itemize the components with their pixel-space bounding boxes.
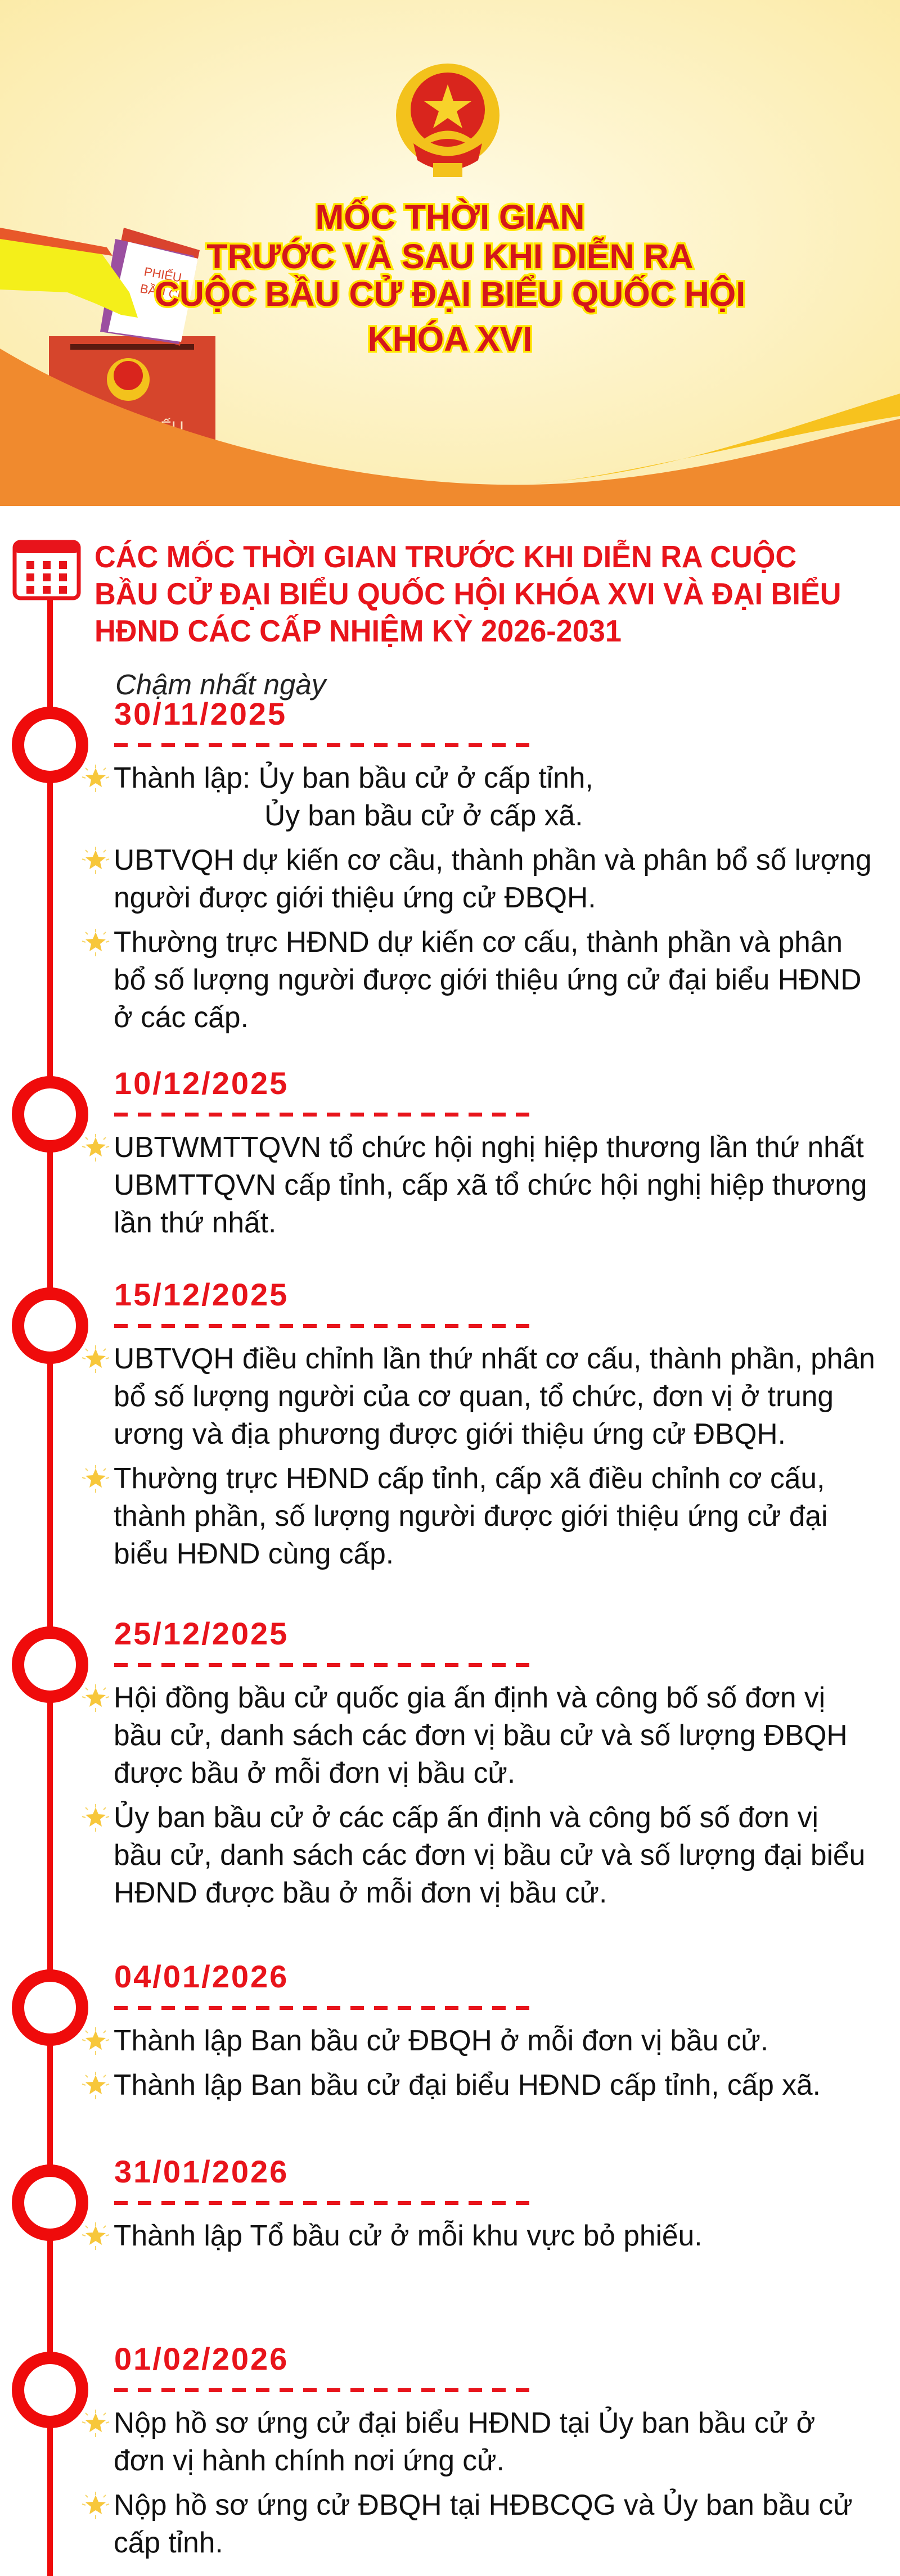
item: 31/01/2026: Thành lập Tổ bầu cử ở mỗi khu vực bỏ phiếu. [114,2219,703,2252]
item: 25/12/2025: bầu cử, danh sách các đơn vị bầu cử và số lượng đại biểu [114,1838,865,1871]
item: 15/12/2025: UBTVQH điều chỉnh lần thứ nhất cơ cấu, thành phần, phân [114,1342,875,1375]
item: 15/12/2025 [12,1277,875,1570]
ballot box illustration: BẦU CỬ [139,281,189,304]
item: 01/02/2026: Nộp hồ sơ ứng cử đại biểu HĐND tại Ủy ban bầu cử ở [114,2406,815,2439]
ballot box illustration: PHIẾU [132,418,184,437]
item: 04/01/2026: Thành lập Ban bầu cử ĐBQH ở mỗi đơn vị bầu cử. [114,2024,768,2057]
item: 25/12/2025: Ủy ban bầu cử ở các cấp ấn định và công bố số đơn vị [114,1801,818,1833]
icon: calendar [12,540,81,600]
item: 30/11/2025: 30/11/2025 [114,696,287,731]
item: 01/02/2026 [12,2341,853,2559]
item: 30/11/2025: UBTVQH dự kiến cơ cầu, thành phần và phân bổ số lượng [114,843,872,876]
ballot box illustration: PHIẾU [143,264,183,285]
item: 25/12/2025: bầu cử, danh sách các đơn vị bầu cử và số lượng ĐBQH [114,1719,848,1751]
item: 25/12/2025: 25/12/2025 [114,1616,289,1651]
decorative wave [534,394,900,483]
item: 04/01/2026: 04/01/2026 [114,1959,289,1994]
timeline vertical line [47,596,53,2576]
item: 25/12/2025 [12,1616,865,1909]
item: 15/12/2025: thành phần, số lượng người được giới thiệu ứng cử đại [114,1499,828,1532]
item: 31/01/2026 [12,2154,703,2252]
title: KHÓA XVI [368,320,532,358]
title [155,198,745,358]
item: 30/11/2025: bổ số lượng người được giới thiệu ứng cử đại biểu HĐND [114,963,861,996]
section heading: BẦU CỬ ĐẠI BIỂU QUỐC HỘI KHÓA XVI VÀ ĐẠI BIỂU [94,576,841,611]
item: 01/02/2026: 01/02/2026 [114,2341,289,2376]
item: 01/02/2026: Nộp hồ sơ ứng cử ĐBQH tại HĐBCQG và Ủy ban bầu cử [114,2488,853,2521]
item: 30/11/2025 [12,668,872,1033]
item: 04/01/2026: Thành lập Ban bầu cử đại biểu HĐND cấp tỉnh, cấp xã. [114,2068,821,2101]
section heading [94,539,841,648]
item: 25/12/2025: được bầu ở mỗi đơn vị bầu cử. [114,1756,515,1789]
item: 30/11/2025: Thành lập: Ủy ban bầu cử ở cấp tỉnh, [114,761,593,794]
section heading: HĐND CÁC CẤP NHIỆM KỲ 2026-2031 [94,613,622,648]
item: 30/11/2025: Chậm nhất ngày [115,668,326,701]
item: 30/11/2025: Thường trực HĐND dự kiến cơ cấu, thành phần và phân [114,925,843,958]
item: 15/12/2025: ương và địa phương được giới thiệu ứng cử ĐBQH. [114,1417,786,1450]
item: 10/12/2025: 10/12/2025 [114,1065,289,1101]
item: 25/12/2025: HĐND được bầu ở mỗi đơn vị bầu cử. [114,1876,607,1909]
item: 01/02/2026: cấp tỉnh. [114,2526,223,2559]
header banner [0,0,900,506]
item: 10/12/2025: lần thứ nhất. [114,1206,276,1239]
item: 15/12/2025: biểu HĐND cùng cấp. [114,1537,394,1570]
title: TRƯỚC VÀ SAU KHI DIỄN RA [206,237,694,275]
item: 25/12/2025: Hội đồng bầu cử quốc gia ấn định và công bố số đơn vị [114,1681,825,1714]
item: 01/02/2026: đơn vị hành chính nơi ứng cử. [114,2444,505,2476]
ballot box illustration [0,228,215,506]
item: 30/11/2025: Ủy ban bầu cử ở cấp xã. [264,799,583,831]
item: 30/11/2025: người được giới thiệu ứng cử ĐBQH. [114,881,596,914]
item: 10/12/2025: UBTWMTTQVN tổ chức hội nghị hiệp thương lần thứ nhất [114,1131,864,1163]
item: 30/11/2025: ở các cấp. [114,1001,249,1033]
title: CUỘC BẦU CỬ ĐẠI BIỂU QUỐC HỘI [155,275,745,313]
item: 15/12/2025: Thường trực HĐND cấp tỉnh, cấp xã điều chỉnh cơ cấu, [114,1462,825,1494]
item: 15/12/2025: bổ số lượng người của cơ quan, tổ chức, đơn vị ở trung [114,1380,834,1412]
item: 15/12/2025: 15/12/2025 [114,1277,289,1312]
icon: national emblem [396,64,500,177]
item: 10/12/2025 [12,1065,867,1239]
item: 04/01/2026 [12,1959,821,2101]
section heading: CÁC MỐC THỜI GIAN TRƯỚC KHI DIỄN RA CUỘC [94,539,796,574]
item: 31/01/2026: 31/01/2026 [114,2154,289,2189]
item: 10/12/2025: UBMTTQVN cấp tỉnh, cấp xã tổ chức hội nghị hiệp thương [114,1168,867,1201]
title: MỐC THỜI GIAN [315,198,585,236]
